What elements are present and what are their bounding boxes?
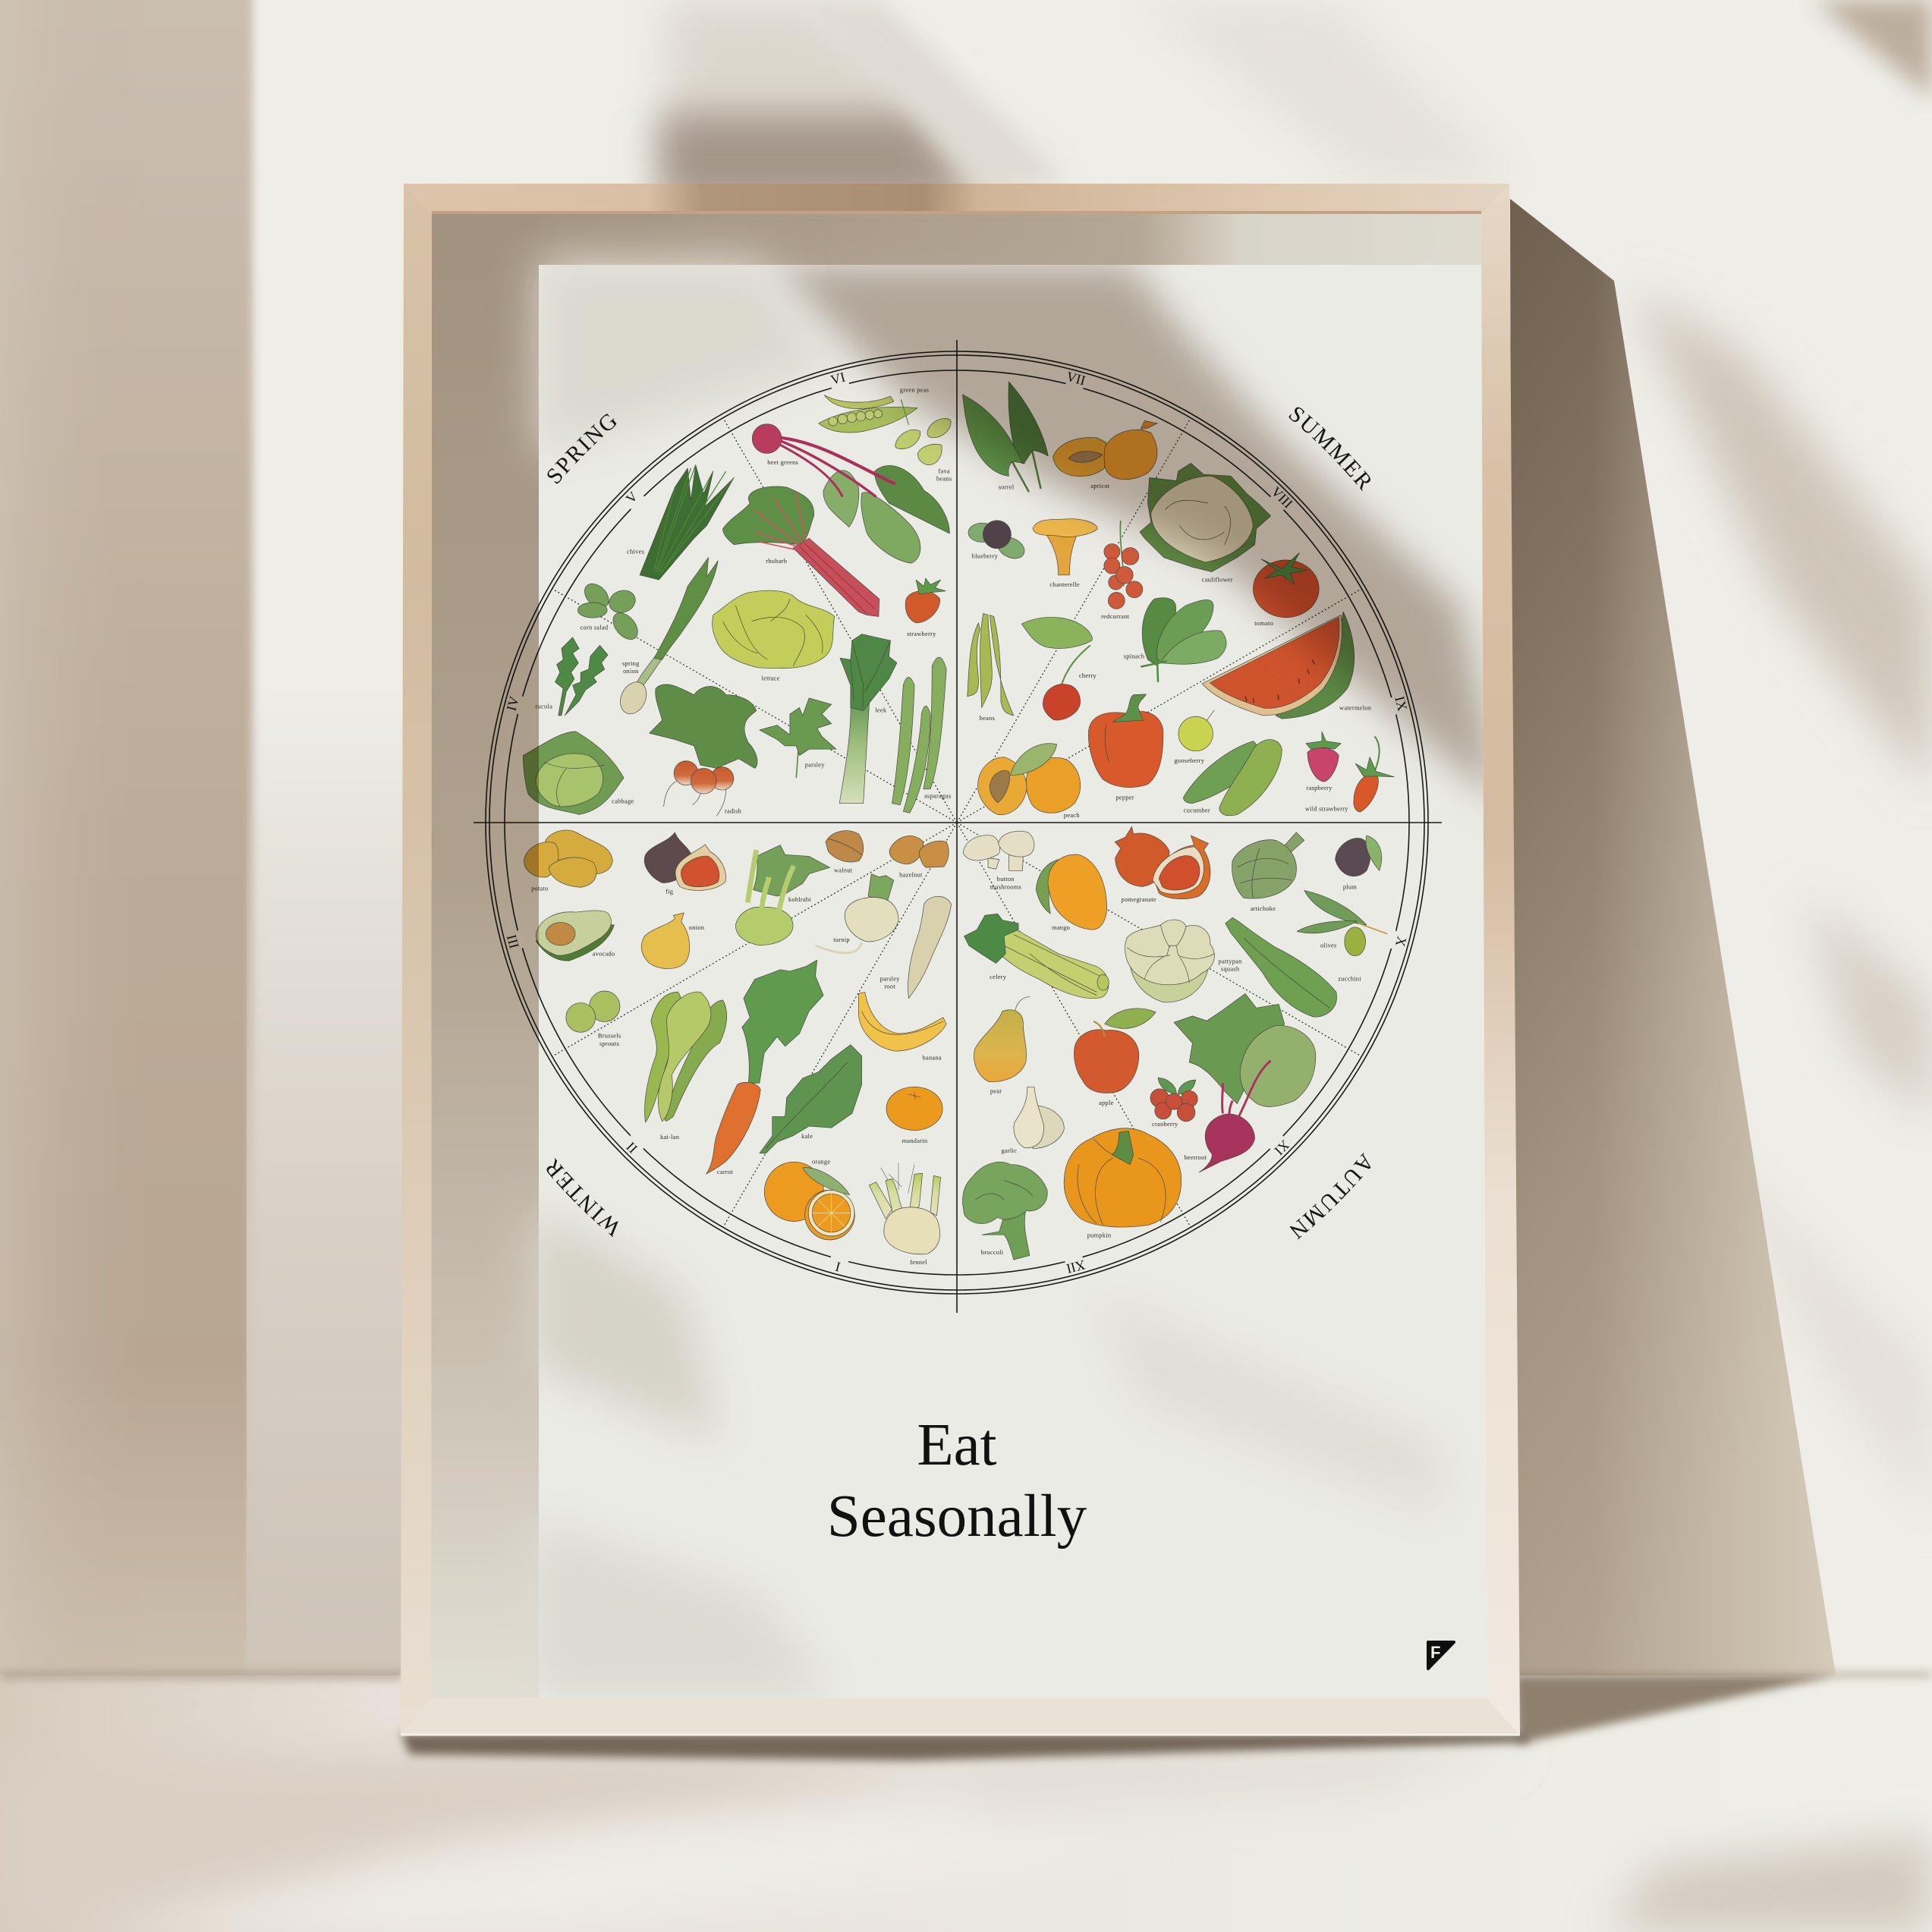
icon: mango: [1036, 854, 1107, 931]
icon: green peas: green peas: [900, 387, 929, 394]
icon: cauliflower: cauliflower: [1202, 577, 1233, 584]
icon: cauliflower: [1140, 463, 1271, 584]
icon: redcurrant: redcurrant: [1101, 613, 1130, 620]
icon: pomegranate: [1115, 826, 1210, 903]
icon: pattypan squash: pattypan: [1219, 958, 1242, 964]
icon: corn salad: [577, 579, 643, 644]
icon: cabbage: cabbage: [612, 798, 634, 805]
light and shadow over poster: [431, 214, 1502, 1698]
icon: wild strawberry: [1305, 736, 1394, 812]
icon: fennel: fennel: [910, 1259, 927, 1266]
icon: carrot: carrot: [717, 1169, 733, 1175]
icon: pumpkin: [1064, 1128, 1182, 1239]
icon: beetroot: beetroot: [1184, 1154, 1207, 1161]
panel: winter produce: [524, 830, 951, 1266]
icon: chanterelle: chanterelle: [1049, 581, 1080, 588]
icon: radish: radish: [725, 807, 742, 814]
icon: olives: olives: [1320, 942, 1337, 949]
frame right bar: [1481, 184, 1520, 1735]
icon: watermelon: [1202, 612, 1372, 719]
icon: blueberry: [968, 521, 1028, 562]
icon: potato: [524, 830, 612, 892]
icon: pomegranate: pomegranate: [1122, 896, 1156, 903]
icon: strawberry: [905, 578, 946, 637]
icon: asparagus: asparagus: [924, 793, 951, 800]
icon: garlic: [1002, 1087, 1064, 1154]
frame top bar: [404, 184, 1509, 214]
icon: strawberry: strawberry: [907, 631, 936, 637]
icon: brand logo: [1428, 1642, 1454, 1669]
icon: apple: [1074, 1008, 1156, 1106]
icon: fava beans: [895, 419, 952, 483]
icon: tomato: [1253, 552, 1319, 627]
icon: pattypan squash: squash: [1221, 966, 1240, 973]
icon: celery: [964, 914, 1109, 999]
icon: apricot: [1053, 420, 1157, 489]
icon: plum: plum: [1343, 883, 1357, 890]
icon: radish: [650, 684, 757, 817]
wooden frame: [401, 184, 1520, 1735]
roman numeral months: IV: [504, 694, 522, 713]
icon: spring onion: [615, 558, 718, 718]
icon: gooseberry: [1174, 710, 1214, 764]
icon: chanterelle: [1033, 519, 1097, 588]
icon: sorrel: [962, 382, 1048, 492]
icon: rucola: [536, 637, 608, 716]
panel: autumn produce: [962, 826, 1387, 1260]
icon: hazelnut: [889, 835, 949, 878]
icon: cherry: [1021, 617, 1097, 720]
icon: spinach: spinach: [1124, 653, 1145, 660]
icon: beetroot: [1174, 993, 1316, 1172]
icon: parsley: parsley: [805, 762, 825, 769]
icon: zucchini: [1226, 917, 1361, 1017]
icon: banana: [858, 992, 946, 1062]
floor: [0, 1672, 1932, 1932]
icon: olives: [1297, 890, 1387, 956]
icon: rhubarb: [723, 486, 879, 616]
icon: onion: onion: [689, 924, 705, 931]
panel: spring produce: [523, 387, 952, 817]
icon: fava beans: fava: [938, 468, 950, 475]
roman numeral months: I: [834, 1259, 842, 1275]
icon: brussels sprouts: Brussels: [598, 1032, 621, 1039]
frame cast shadow on wall: [1510, 199, 1836, 1676]
icon: button mushrooms: button: [997, 876, 1015, 883]
title: Seasonally: [827, 1484, 1087, 1550]
icon: kohlrabi: kohlrabi: [788, 896, 811, 903]
icon: parsley: [760, 698, 836, 778]
roman numeral months: X: [1392, 935, 1410, 949]
icon: pumpkin: pumpkin: [1087, 1232, 1112, 1239]
icon: turnip: [816, 874, 898, 953]
icon: avocado: [536, 911, 615, 961]
icon: fig: fig: [666, 889, 674, 895]
poster paper: [431, 214, 1487, 1698]
icon: parsley root: [880, 896, 951, 999]
icon: orange: [764, 1158, 854, 1240]
icon: mango: mango: [1052, 924, 1070, 931]
icon: onion: [641, 913, 705, 969]
icon: hazelnut: hazelnut: [899, 871, 923, 878]
seasonal wheel chart: [474, 340, 1442, 1313]
icon: cucumber: cucumber: [1184, 807, 1210, 814]
frame bottom bar: [401, 1698, 1520, 1735]
icon: celery: celery: [990, 974, 1007, 980]
icon: potato: potato: [531, 885, 549, 892]
roman numeral months: [504, 369, 1410, 1276]
icon: pepper: pepper: [1115, 795, 1134, 801]
frame left bar: [401, 184, 432, 1735]
season label: winter: WINTER: [546, 1158, 618, 1237]
icon: wild strawberry: wild strawberry: [1305, 805, 1348, 812]
icon: beans: beans: [980, 715, 995, 722]
icon: leek: [839, 634, 897, 804]
icon: garlic: garlic: [1002, 1147, 1017, 1154]
title: [827, 1412, 1087, 1550]
icon: beet greens: [752, 424, 949, 563]
icon: artichoke: [1232, 832, 1304, 912]
icon: kale: [760, 1045, 862, 1153]
icon: lettuce: [713, 590, 835, 681]
icon: broccoli: [962, 1162, 1047, 1260]
title: Eat: [917, 1412, 997, 1478]
icon: cranberry: cranberry: [1152, 1121, 1178, 1128]
icon: pear: [974, 997, 1031, 1095]
icon: asparagus: [892, 657, 951, 813]
roman numeral months: IX: [1392, 694, 1410, 713]
icon: lettuce: lettuce: [762, 675, 780, 681]
icon: fig: [644, 832, 725, 895]
wheel axes: [474, 340, 1442, 1313]
roman numeral months: VII: [1065, 369, 1087, 389]
roman numeral months: XII: [1065, 1257, 1087, 1276]
roman numeral months: II: [623, 1139, 640, 1156]
icon: peach: peach: [1064, 812, 1080, 819]
icon: orange: orange: [812, 1158, 830, 1165]
wheel rings: [410, 275, 1504, 1370]
panel: summer produce: [962, 382, 1394, 819]
icon: banana: banana: [923, 1055, 942, 1062]
icon: beans: [968, 613, 1014, 722]
season label: summer: SUMMER: [1289, 407, 1370, 492]
icon: tomato: tomato: [1254, 620, 1273, 627]
icon: fennel: [869, 1163, 941, 1266]
icon: chives: [627, 465, 734, 580]
icon: walnut: [826, 831, 864, 873]
roman numeral months: VIII: [1268, 483, 1296, 511]
icon: kale: kale: [801, 1133, 813, 1140]
month spokes: [552, 418, 1361, 1227]
icon: button mushrooms: mushrooms: [990, 883, 1021, 890]
icon: rhubarb: rhubarb: [766, 558, 787, 565]
icon: mandarin: mandarin: [902, 1137, 928, 1144]
roman numeral months: III: [504, 933, 522, 950]
icon: turnip: turnip: [833, 936, 850, 943]
icon: spinach: [1124, 598, 1226, 682]
icon: cucumber: [1184, 740, 1282, 816]
icon: blueberry: blueberry: [972, 552, 999, 559]
icon: spring onion: spring: [622, 660, 640, 667]
icon: artichoke: artichoke: [1251, 905, 1276, 912]
icon: sorrel: sorrel: [999, 484, 1015, 491]
icon: parsley root: parsley: [880, 976, 900, 983]
icon: raspberry: [1306, 732, 1341, 791]
icon: watermelon: watermelon: [1339, 704, 1372, 711]
icon: peach: [978, 744, 1081, 819]
icon: brand logo: F: [1430, 1643, 1440, 1662]
icon: mandarin: [886, 1087, 942, 1144]
icon: rucola: rucola: [536, 703, 552, 710]
icon: apricot: apricot: [1090, 483, 1110, 489]
icon: parsley root: root: [884, 983, 895, 990]
roman numeral months: XI: [1272, 1137, 1292, 1158]
frame cast shadow on floor: [401, 1676, 1836, 1761]
icon: green peas: [819, 387, 929, 433]
icon: cherry: cherry: [1079, 672, 1097, 679]
icon: button mushrooms: [963, 831, 1034, 890]
icon: kai-lan: kai-lan: [660, 1134, 680, 1141]
icon: brussels sprouts: sprouts: [599, 1040, 619, 1047]
icon: gooseberry: gooseberry: [1174, 757, 1205, 764]
season label: spring: SPRING: [547, 414, 616, 484]
roman numeral months: V: [623, 489, 640, 506]
icon: redcurrant: [1101, 521, 1143, 620]
icon: walnut: walnut: [834, 867, 853, 873]
icon: cranberry: [1150, 1078, 1197, 1128]
icon: corn salad: corn salad: [580, 624, 609, 631]
icon: zucchini: zucchini: [1338, 976, 1361, 983]
icon: fava beans: beans: [936, 476, 952, 483]
icon: plum: [1336, 835, 1382, 890]
icon: kohlrabi: [735, 845, 830, 945]
icon: pepper: [1088, 694, 1163, 801]
icon: pattypan squash: [1125, 920, 1242, 1002]
season label: autumn: AUTUMN: [1290, 1152, 1370, 1240]
icon: chives: chives: [627, 549, 644, 555]
icon: brussels sprouts: [566, 991, 621, 1047]
roman numeral months: VI: [829, 370, 847, 388]
icon: apple: apple: [1099, 1100, 1114, 1106]
icon: broccoli: broccoli: [981, 1249, 1004, 1256]
icon: raspberry: raspberry: [1307, 785, 1333, 791]
icon: kai-lan: [645, 992, 727, 1141]
icon: avocado: avocado: [593, 950, 615, 957]
icon: leek: leek: [875, 706, 887, 713]
icon: spring onion: onion: [623, 668, 639, 675]
icon: beet greens: beet greens: [767, 459, 798, 466]
icon: pear: pear: [990, 1088, 1002, 1095]
icon: carrot: [706, 960, 823, 1175]
icon: cabbage: [523, 732, 634, 814]
